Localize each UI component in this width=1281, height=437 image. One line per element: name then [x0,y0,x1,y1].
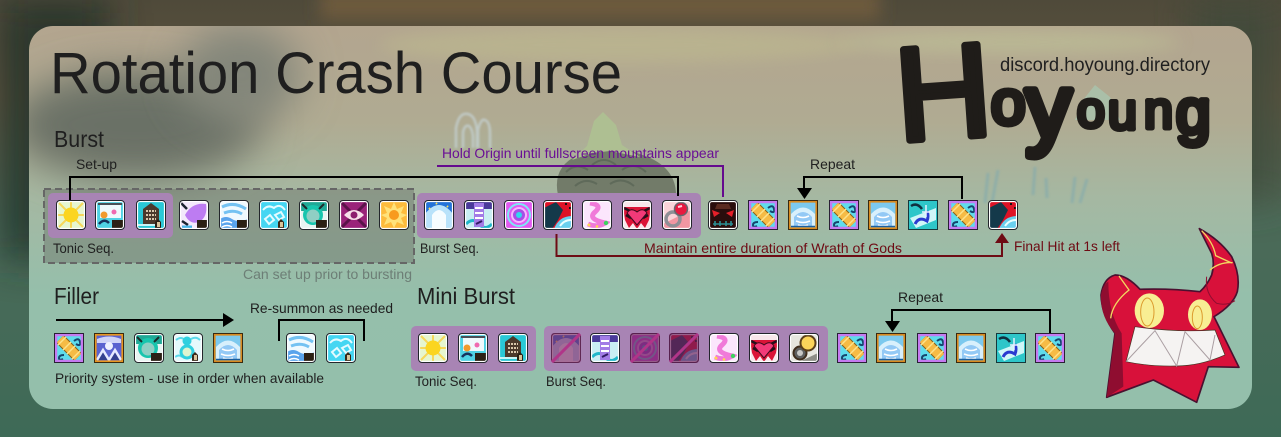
arrow: set-up bracket [70,177,678,200]
label: can set up: Can set up prior to bursting [243,266,412,282]
icon: dome [214,334,242,362]
label: mini repeat: Repeat [898,289,943,305]
icon: gold drill [918,334,946,362]
panel: burst tonic sequence highlight [48,193,173,238]
icon: heart [622,200,652,230]
burst icon row [56,200,1018,230]
icon: wrath final [988,200,1018,230]
arrow: wrath duration [556,233,1009,256]
logo: Hoyoung: g [1176,78,1210,147]
icon: gold drill [54,334,84,362]
icon: moon [424,200,454,230]
icon: pink swirl [582,200,612,230]
label: mini burst seq: Burst Seq. [546,373,606,389]
icon: gourd [174,334,202,362]
icon: gold drill [748,200,778,230]
label: burst tonic seq: Tonic Seq. [53,240,114,256]
icon: purple swirl [180,200,208,230]
arrow: burst repeat [797,177,962,199]
icon: teal face [300,200,328,230]
label: burst seq: Burst Seq. [420,240,479,256]
logo: Hoyoung: n [1144,82,1173,140]
arrow: filler priority [56,313,234,327]
icon: gold drill [838,334,866,362]
icon: dome [868,200,898,230]
mascot: red horned creature [1101,229,1239,402]
icon: dragon [908,200,938,230]
bracket: re-summon [279,320,364,341]
logo: Hoyoung: o [991,69,1025,138]
arrow: mini repeat [885,310,1050,333]
panel: dashed set-up box [44,189,414,263]
panel: mini burst highlight [544,326,828,371]
panel: burst sequence highlight [417,193,701,238]
icon: cyan cloud [326,334,356,362]
icon: wave [220,200,248,230]
icon: tablet [136,200,166,230]
icon: orange sun [380,200,408,230]
icon: mountains [94,334,124,362]
icon: gold ring [790,334,818,362]
icon: gold drill [830,200,858,230]
icon: mask [708,200,738,230]
icon: totem [590,334,620,362]
filler icon row [54,334,356,362]
icon: dome [956,334,986,362]
icon: teal face [134,334,164,362]
label: re-summon: Re-summon as needed [250,300,393,316]
icon: gold drill [948,200,978,230]
icon: sun [56,200,86,230]
icon: eye [340,200,368,230]
icon: red ring [662,200,692,230]
icon: totem [464,200,494,230]
logo url text: discord.hoyoung.directory [1000,55,1210,76]
icon: rings [504,200,534,230]
label: set-up: Set-up [76,156,117,172]
icon: dome [876,334,906,362]
title: Rotation Crash Course [50,41,622,106]
icon: gold drill [1036,334,1064,362]
icon: heart [750,334,778,362]
logo: Hoyoung: y [1026,58,1071,158]
icon: dragon [996,334,1026,362]
icon: pink swirl [710,334,738,362]
icon: disabled rings [630,333,660,363]
icon: scroll [458,334,488,362]
logo: Hoyoung: o [1077,82,1105,138]
icon: sun [418,334,448,362]
label: hold origin: Hold Origin until fullscreen mountains appear [442,145,719,161]
arrow: hold origin bracket [437,166,723,197]
heading: burst: Burst [54,126,105,152]
icon: dome [788,200,818,230]
icon: tablet [498,334,528,362]
panel: mini tonic highlight [411,326,536,371]
label: maintain: Maintain entire duration of Wrath of Gods [644,240,902,256]
logo: Hoyoung: u [1108,83,1137,141]
icon: wave [286,334,316,362]
logo: Hoyoung: H [891,16,996,169]
label: mini tonic seq: Tonic Seq. [415,373,477,389]
icon: disabled moon [551,333,581,363]
icon: scroll [96,200,124,230]
icon: wrath [544,200,572,230]
heading: mini burst: Mini Burst [417,283,516,309]
label: final hit: Final Hit at 1s left [1014,238,1120,254]
label: repeat: Repeat [810,156,855,172]
label: priority: Priority system - use in order when available [55,370,324,386]
icon: disabled wrath [669,333,699,363]
heading: filler: Filler [54,283,99,309]
icon: cyan cloud [260,200,288,230]
mini burst icon row [418,333,1064,363]
